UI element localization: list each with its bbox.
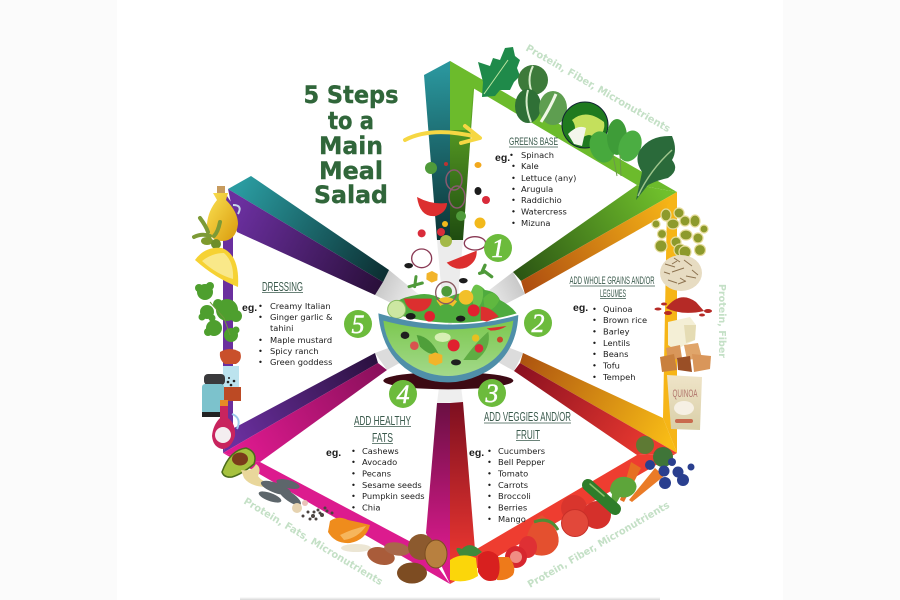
panel: dressing text: • <box>258 346 263 356</box>
salad heap <box>388 282 517 323</box>
step 2 badge <box>524 309 552 338</box>
panel: grains text: Beans <box>603 349 628 359</box>
title: Meal <box>319 157 383 185</box>
panel: dressing text: tahini <box>270 323 293 333</box>
white page panel <box>117 0 783 600</box>
floating toppings <box>404 229 492 287</box>
step 4 badge <box>389 380 417 409</box>
panel: fats text: Pecans <box>362 468 391 478</box>
panel: veggies text: eg. <box>469 447 484 459</box>
pale spokes near bowl <box>375 240 525 403</box>
panel: veggies text: • <box>487 457 492 467</box>
salad bowl <box>378 229 518 389</box>
panel: dressing text: • <box>258 335 263 345</box>
panel: grains text: • <box>592 304 597 314</box>
panel: greens base text: • <box>511 195 516 205</box>
icons: greens <box>478 47 675 200</box>
panel: fats text <box>326 413 425 512</box>
panel: greens base text: Lettuce (any) <box>521 173 576 183</box>
panel: greens base text: Spinach <box>521 150 554 160</box>
title: 5 Steps <box>304 81 398 109</box>
rim: veggies <box>450 453 677 584</box>
panel: dressing text <box>242 279 333 367</box>
step 1 badge <box>484 234 512 263</box>
icons: veggies and fruit <box>450 436 694 581</box>
rim: fats <box>223 453 450 584</box>
panel: veggies text: • <box>487 468 492 478</box>
panel: veggies text: • <box>487 446 492 456</box>
panel: greens base text: • <box>511 173 516 183</box>
panel: greens base text: • <box>511 161 516 171</box>
rim: grains <box>663 192 677 453</box>
panel: veggies text: Bell Pepper <box>498 457 545 467</box>
panel: grains text: • <box>592 326 597 336</box>
panel: grains text: eg. <box>573 302 588 314</box>
step 3 badge: 3 <box>484 379 498 408</box>
panel: fats text: Sesame seeds <box>362 480 422 490</box>
panel: veggies text: ADD VEGGIES AND/OR <box>484 409 571 424</box>
step 5 badge: 5 <box>352 310 364 339</box>
title: to a <box>328 107 374 135</box>
panel: dressing text: • <box>258 301 263 311</box>
arrow: yellow curve <box>405 126 480 143</box>
side label: bottom right: Protein, Fiber, Micronutrients <box>526 500 672 591</box>
panel: grains text: LEGUMES <box>600 288 626 300</box>
panel: veggies text: FRUIT <box>516 427 540 442</box>
spoke 4: red and magenta <box>426 402 475 584</box>
panel: grains text: Lentils <box>603 338 630 348</box>
panel: greens base text: • <box>509 150 514 160</box>
panel: fats text: • <box>351 480 356 490</box>
panel: fats text: • <box>351 446 356 456</box>
icon: brown rice <box>660 255 702 291</box>
panel: veggies text: Tomato <box>497 468 528 478</box>
title: Main <box>319 132 383 160</box>
panel: fats text: Cashews <box>362 446 399 456</box>
rim: dressing <box>223 190 233 453</box>
panel: dressing text: Green goddess <box>270 357 332 367</box>
panel: grains text: • <box>592 315 597 325</box>
panel: grains text: Tempeh <box>602 372 635 382</box>
panel: greens base text: Kale <box>521 161 539 171</box>
icon: tempeh <box>660 343 711 372</box>
step 4 badge: 4 <box>396 380 410 409</box>
bowl contents <box>401 326 507 366</box>
panel: greens base text: • <box>511 184 516 194</box>
panel: greens base text: Mizuna <box>521 218 550 228</box>
icon: quinoa bag: QUINOA <box>672 388 698 400</box>
panel: veggies text: • <box>487 502 492 512</box>
panel: greens base text: Raddichio <box>521 195 562 205</box>
step 5 badge <box>344 310 372 339</box>
panel: dressing text: eg. <box>242 302 257 314</box>
bowl shadow <box>383 372 513 389</box>
panel: fats text: ADD HEALTHY <box>354 413 411 428</box>
panel: grains text: • <box>592 372 597 382</box>
hexagon wheel <box>223 61 677 584</box>
panel: fats text: eg. <box>326 447 341 459</box>
panel: veggies text: • <box>487 491 492 501</box>
spoke 1 top: teal and green <box>424 61 475 240</box>
title <box>304 81 398 209</box>
icon: falling ingredients <box>417 162 490 247</box>
panel: grains text: • <box>592 338 597 348</box>
panel: fats text: • <box>351 468 356 478</box>
icon: red beans <box>654 297 712 316</box>
side label: top right: Protein, Fiber, Micronutrients <box>524 43 672 135</box>
panel: grains text <box>570 275 655 382</box>
rim: greens <box>450 61 677 192</box>
icons: dressing <box>194 186 242 449</box>
panel: grains text: Tofu <box>602 360 620 370</box>
panel: greens base text <box>495 136 576 228</box>
panel: greens base text: • <box>511 218 516 228</box>
panel: fats text: • <box>351 457 356 467</box>
panel: dressing text: Spicy ranch <box>270 346 319 356</box>
bowl glass <box>378 313 518 382</box>
step 1 badge: 1 <box>492 234 504 263</box>
icon: tofu <box>668 317 696 350</box>
panel: fats text: • <box>351 502 356 512</box>
panel: veggies text: Carrots <box>498 480 528 490</box>
panel: dressing text: Ginger garlic & <box>270 312 333 322</box>
panel: dressing text: • <box>258 357 263 367</box>
panel: greens base text: eg. <box>495 152 510 164</box>
spoke 5: purple and magenta <box>223 353 387 462</box>
panel: grains text: • <box>592 360 597 370</box>
panel: fats text: Chia <box>362 502 380 512</box>
panel: dressing text: Creamy Italian <box>270 301 331 311</box>
panel: veggies text: • <box>487 480 492 490</box>
panel: veggies text: Broccoli <box>498 491 531 501</box>
panel: veggies text: • <box>487 514 492 524</box>
step 3 badge <box>478 379 506 408</box>
panel: veggies text: Berries <box>498 502 527 512</box>
icons: lentils <box>652 208 708 258</box>
panel: veggies text <box>469 409 571 524</box>
step 2 badge: 2 <box>532 309 544 338</box>
title: Salad <box>314 181 388 209</box>
panel: greens base text: • <box>511 206 516 216</box>
icons: healthy fats <box>222 448 447 584</box>
panel: fats text: • <box>351 491 356 501</box>
panel: veggies text: Cucumbers <box>498 446 545 456</box>
spoke 6: teal and purple <box>228 176 389 295</box>
panel: fats text: FATS <box>372 430 393 445</box>
panel: dressing text: • <box>258 312 263 322</box>
panel: fats text: Pumpkin seeds <box>362 491 425 501</box>
panel: grains text: • <box>592 349 597 359</box>
panel: dressing text: Maple mustard <box>270 335 332 345</box>
panel: greens base text: Arugula <box>521 184 553 194</box>
panel: greens base text: Watercress <box>521 206 567 216</box>
panel: grains text: ADD WHOLE GRAINS AND/OR <box>570 275 655 287</box>
side label: right: Protein, Fiber <box>716 284 727 358</box>
side label: bottom left: Protein, Fats, Micronutrients <box>241 496 384 588</box>
spoke 3: orange and red <box>514 353 677 455</box>
icon: quinoa bag <box>667 375 702 430</box>
panel: dressing text: DRESSING <box>262 279 303 294</box>
panel: grains text: Quinoa <box>603 304 633 314</box>
panel: grains text: Barley <box>603 326 630 336</box>
panel: greens base text: GREENS BASE <box>509 136 558 148</box>
panel: fats text: Avocado <box>362 457 397 467</box>
panel: grains text: Brown rice <box>603 315 647 325</box>
spoke 2: green and orange <box>513 185 677 294</box>
panel: veggies text: Mango <box>498 514 526 524</box>
